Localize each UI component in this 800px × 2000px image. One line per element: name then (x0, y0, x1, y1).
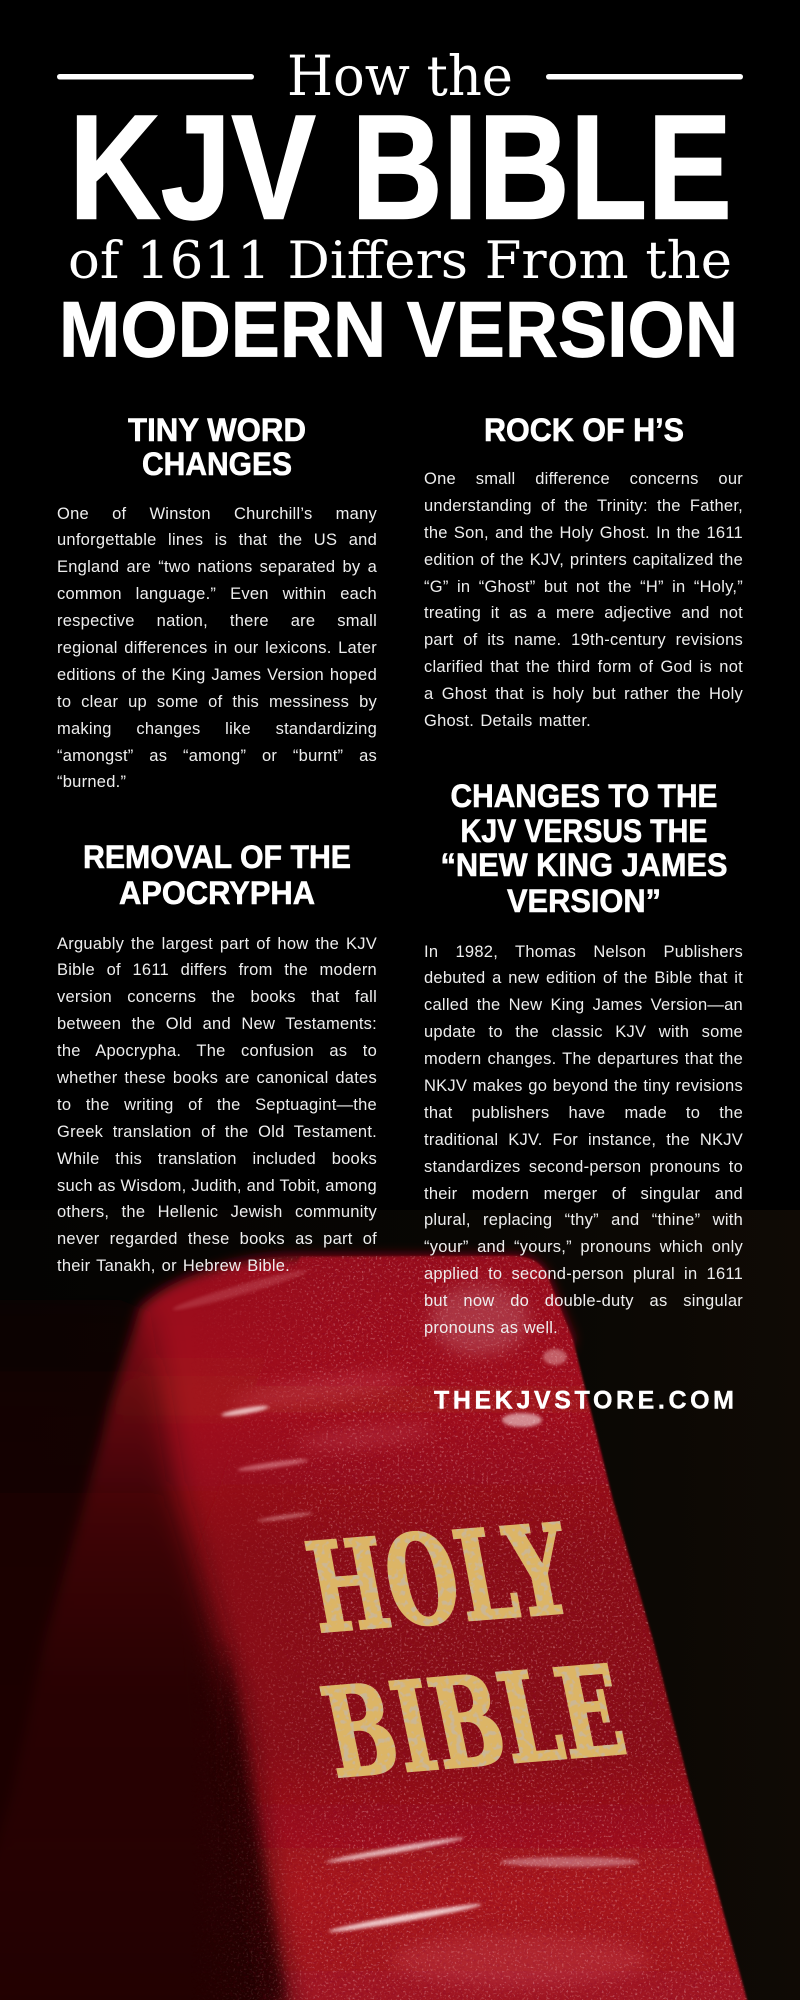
text block: changes to the KJV: debuted a new edition of the Bible that it (424, 969, 743, 987)
heading: tiny word changes (128, 412, 306, 482)
gold lettering: HOLY BIBLE (297, 1497, 636, 1806)
text block: removal of the apocrypha: never regarded these books as part of (57, 1230, 377, 1248)
text block: changes to the KJV: pronouns as well. (424, 1319, 558, 1337)
text block: changes to the KJV: that publishers have made to the (424, 1104, 743, 1122)
panel: changes to the KJV versus the New King James Version (424, 778, 743, 1337)
text block: rock of H's (424, 470, 743, 730)
panel: removal of the apocrypha (57, 839, 377, 1275)
title rule right (546, 74, 743, 80)
text block: rock of H's: One small difference concerns our (424, 470, 743, 488)
text block: rock of H's: “G” in “Ghost” but not the “H” in “Holy,” (424, 578, 743, 596)
text block: changes to the KJV: plural, replacing “thy” and “thine” with (424, 1211, 743, 1229)
heading: removal of the apocrypha: APOCRYPHA (119, 875, 315, 911)
text block: removal of the apocrypha (57, 934, 377, 1275)
heading: tiny word changes: TINY WORD (128, 412, 306, 448)
text block: removal of the apocrypha: between the Old and New Testaments: (57, 1015, 377, 1033)
text block: removal of the apocrypha: such as Wisdom, Judith, and Tobit, among (57, 1177, 377, 1195)
text block: tiny word changes: editions of the King James Version hoped (57, 666, 377, 684)
background photo: red Holy Bible (0, 1210, 800, 2000)
text block: changes to the KJV (424, 942, 743, 1337)
text block: removal of the apocrypha: to the writing of the Septuagint—the (57, 1096, 377, 1114)
website label: THEKJVSTORE.COM (434, 1386, 734, 1414)
heading: rock of H's: ROCK OF H’S (484, 412, 684, 448)
title line: MODERN VERSION: MODERN VERSION (59, 284, 738, 374)
text block: changes to the KJV: update to the classic KJV with some (424, 1023, 743, 1041)
text block: tiny word changes: “burned.” (57, 773, 126, 791)
text block: rock of H's: a Ghost that is holy but rather the Holy (424, 685, 743, 703)
text block: changes to the KJV: modern changes. The departures that the (424, 1050, 743, 1068)
shadowed side of the book (0, 1300, 300, 2000)
title line: of 1611 Differs From the: of 1611 Differs From the (68, 232, 732, 291)
text block: changes to the KJV: “your” and “yours,” pronouns which only (424, 1238, 743, 1256)
text block: removal of the apocrypha: While this translation included books (57, 1150, 377, 1168)
text block: changes to the KJV: but now do double-duty as singular (424, 1292, 743, 1310)
book: soft-focus outline (0, 1256, 573, 2000)
text block: rock of H's: treating it as a mere adjective and not (424, 604, 743, 622)
text block: changes to the KJV: traditional KJV. For instance, the NKJV (424, 1131, 743, 1149)
text block: changes to the KJV: applied to second-person plural in 1611 (424, 1265, 743, 1283)
text block: removal of the apocrypha: their Tanakh, or Hebrew Bible. (57, 1257, 290, 1275)
text block: tiny word changes: common language.” Even within each (57, 585, 377, 603)
text block: changes to the KJV: In 1982, Thomas Nelson Publishers (424, 942, 743, 960)
heading: removal of the apocrypha: REMOVAL OF THE (83, 839, 351, 875)
text block: rock of H's: Ghost. Details matter. (424, 712, 591, 730)
heading: changes to the KJV: KJV VERSUS THE (460, 813, 708, 849)
text block: changes to the KJV: their modern merger of singular and (424, 1185, 743, 1203)
text block: tiny word changes: England are “two nations separated by a (57, 558, 377, 576)
heading: tiny word changes: CHANGES (142, 446, 292, 482)
text block: tiny word changes: regional differences in our lexicons. Later (57, 639, 377, 657)
text block: removal of the apocrypha: version concerns the books that fall (57, 988, 377, 1006)
text block: removal of the apocrypha: others, the Hellenic Jewish community (57, 1203, 377, 1221)
text block: removal of the apocrypha: Arguably the largest part of how the KJV (57, 934, 377, 952)
book spine (0, 1250, 770, 2000)
text block: tiny word changes: to clear up some of this messiness by (57, 693, 377, 711)
text block: changes to the KJV: standardizes second-person pronouns to (424, 1158, 743, 1176)
panel: rock of H's (424, 412, 743, 730)
text block: tiny word changes: One of Winston Churchill’s many (57, 504, 377, 522)
text block: removal of the apocrypha: Greek translation of the Old Testament. (57, 1123, 377, 1141)
text block: tiny word changes: making changes like standardizing (57, 720, 377, 738)
text block: removal of the apocrypha: the Apocrypha. The confusion as to (57, 1042, 377, 1060)
heading: changes to the KJV: “NEW KING JAMES (440, 847, 728, 883)
text block: rock of H's: understanding of the Trinity: the Father, (424, 497, 743, 515)
title (56, 44, 743, 374)
text block: rock of H's: the Son, and the Holy Ghost. In the 1611 (424, 524, 743, 542)
text block: changes to the KJV: called the New King James Version—an (424, 996, 743, 1014)
heading: changes to the KJV: CHANGES TO THE (450, 778, 718, 814)
heading: removal of the apocrypha (83, 839, 351, 911)
title rule left (57, 74, 254, 80)
title line: How the: How the (287, 44, 513, 108)
text block: changes to the KJV: NKJV makes go beyond the tiny revisions (424, 1077, 743, 1095)
text block: rock of H's: part of its name. 19th-century revisions (424, 631, 743, 649)
heading: changes to the KJV (440, 778, 728, 919)
text block: removal of the apocrypha: whether these books are canonical dates (57, 1069, 377, 1087)
text block: tiny word changes: unforgettable lines is that the US and (57, 531, 377, 549)
text block: tiny word changes: respective nation, there are small (57, 612, 377, 630)
text block: tiny word changes: “amongst” as “among” or “burnt” as (57, 747, 377, 765)
text block: rock of H's: clarified that the third form of God is not (424, 658, 743, 676)
panel: tiny word changes (57, 412, 377, 791)
gold lettering: HOLY BIBLE: BIBLE (311, 1639, 636, 1806)
text block: rock of H's: edition of the KJV, printers capitalized the (424, 551, 743, 569)
text block: tiny word changes (57, 504, 377, 791)
text block: removal of the apocrypha: Bible of 1611 differs from the modern (57, 961, 377, 979)
gold lettering: HOLY BIBLE: HOLY (297, 1497, 581, 1662)
heading: changes to the KJV: VERSION” (507, 883, 661, 919)
